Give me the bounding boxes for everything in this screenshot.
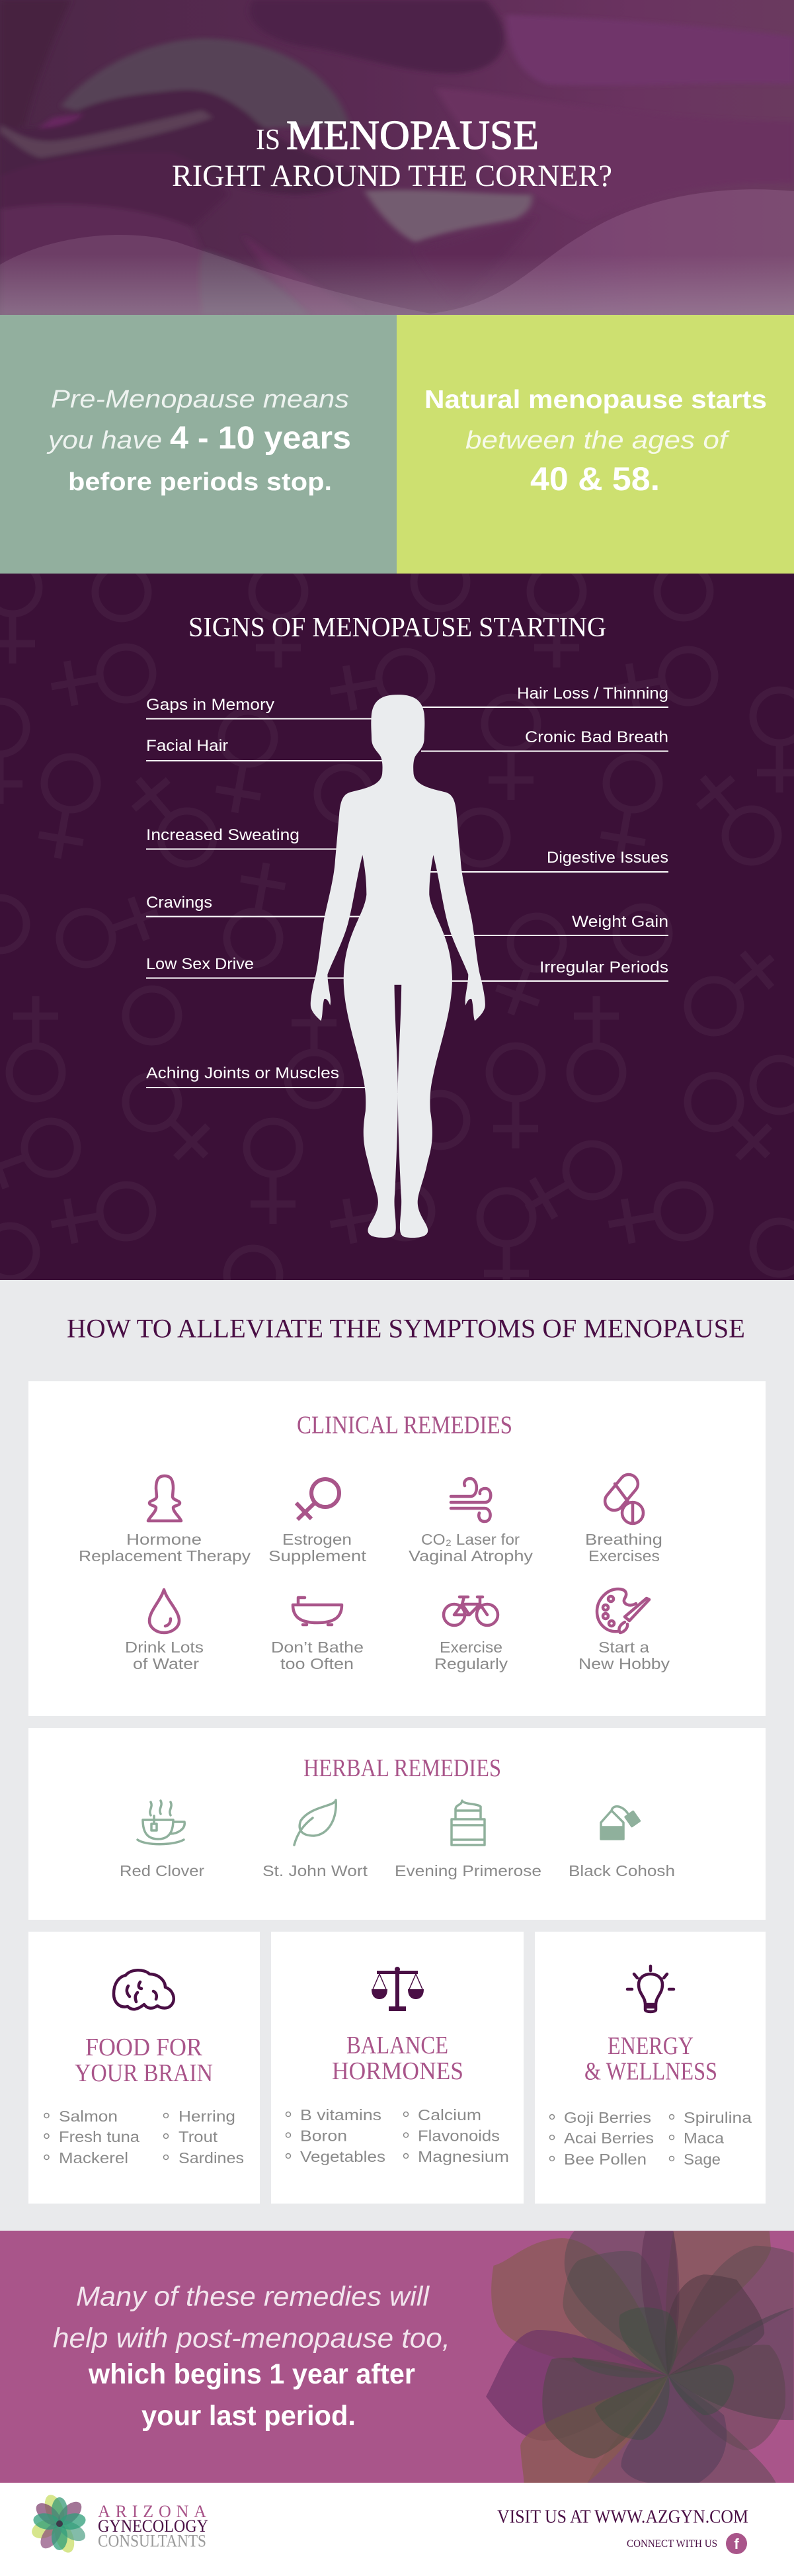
panel: pre-menopause bbox=[0, 315, 397, 574]
symptom labels: Digestive Issues bbox=[547, 849, 668, 867]
icon: jar bbox=[452, 1801, 485, 1845]
heading: food for your brain: YOUR BRAIN bbox=[75, 2059, 213, 2087]
text: breathing exercises: Exercises bbox=[588, 1547, 660, 1565]
panel: natural menopause: 40 & 58. bbox=[530, 460, 660, 497]
panel: pre-menopause: you have bbox=[46, 427, 162, 454]
body silhouette bbox=[311, 695, 485, 1238]
symptom leader lines bbox=[146, 707, 668, 1088]
website: VISIT US AT WWW.AZGYN.COM bbox=[497, 2507, 748, 2527]
list: hormone balancers: Calcium bbox=[418, 2106, 481, 2124]
panel: how to alleviate background bbox=[0, 1280, 794, 2231]
list: hormone balancers: B vitamins bbox=[300, 2106, 381, 2124]
symptom labels: Hair Loss / Thinning bbox=[517, 685, 668, 703]
heading: energy and wellness bbox=[584, 2032, 717, 2085]
text: start a new hobby: New Hobby bbox=[578, 1655, 670, 1672]
text: co2 laser: Vaginal Atrophy bbox=[409, 1547, 534, 1565]
text: don't bathe too often: too Often bbox=[280, 1655, 354, 1672]
list: energy foods: Maca bbox=[684, 2129, 724, 2147]
panel: pre-menopause: 4 - 10 years bbox=[170, 421, 351, 456]
icon: palette bbox=[597, 1589, 649, 1633]
title: IS bbox=[256, 123, 280, 155]
text: don't bathe too often bbox=[271, 1639, 364, 1672]
title bbox=[172, 113, 612, 193]
logo text bbox=[98, 2502, 208, 2551]
text: herbal labels: Black Cohosh bbox=[569, 1862, 675, 1879]
text: drink lots of water: of Water bbox=[133, 1655, 199, 1672]
list: energy foods: Goji Berries bbox=[564, 2109, 651, 2126]
list: energy foods: Spirulina bbox=[684, 2109, 752, 2126]
connect text: CONNECT WITH US bbox=[627, 2538, 717, 2550]
list: brain foods: Mackerel bbox=[59, 2149, 128, 2167]
text: breathing exercises: Breathing bbox=[585, 1531, 662, 1548]
text: exercise regularly: Exercise bbox=[440, 1639, 502, 1656]
text: hormone replacement therapy bbox=[79, 1531, 251, 1565]
text: start a new hobby: Start a bbox=[598, 1639, 649, 1656]
text: estrogen supplement: Supplement bbox=[268, 1547, 367, 1565]
icon: brain bbox=[114, 1970, 174, 2009]
text: drink lots of water bbox=[125, 1639, 204, 1672]
heading: how to alleviate: HOW TO ALLEVIATE THE SYMPTOMS OF MENOPAUSE bbox=[67, 1314, 745, 1343]
icon: tea bag bbox=[601, 1807, 639, 1839]
symptom labels: Cravings bbox=[146, 894, 212, 912]
title: MENOPAUSE bbox=[286, 113, 539, 158]
text: hormone replacement therapy: Replacement Therapy bbox=[79, 1547, 251, 1565]
text: co2 laser bbox=[409, 1531, 534, 1565]
symptom labels: Irregular Periods bbox=[539, 959, 668, 976]
panel: herbal remedies bbox=[28, 1728, 766, 1920]
heading: balance hormones: BALANCE bbox=[346, 2032, 448, 2059]
icon: facebook: f bbox=[734, 2536, 739, 2552]
icon: scales bbox=[372, 1967, 424, 2011]
logo text: ARIZONA bbox=[98, 2502, 206, 2521]
symptom labels: Weight Gain bbox=[572, 913, 668, 931]
icon: bicycle bbox=[444, 1597, 498, 1625]
text: breathing exercises bbox=[585, 1531, 662, 1565]
text: co2 laser: CO₂ Laser for bbox=[421, 1531, 520, 1548]
list: brain foods: Herring bbox=[179, 2108, 235, 2125]
symptom labels: Low Sex Drive bbox=[146, 955, 254, 973]
list: hormone balancers bbox=[286, 2106, 509, 2165]
icon: bathtub bbox=[293, 1598, 342, 1625]
icon: facebook bbox=[726, 2533, 747, 2554]
panel: clinical remedies bbox=[28, 1381, 766, 1716]
panel: natural menopause: between the ages of bbox=[465, 427, 730, 454]
panel: natural menopause bbox=[397, 315, 794, 574]
symptom labels: Gaps in Memory bbox=[146, 696, 274, 714]
canyon rock shapes bbox=[0, 0, 794, 315]
icon: tea cup bbox=[138, 1801, 184, 1844]
symptom labels: Cronic Bad Breath bbox=[525, 728, 668, 746]
heading: food for your brain: FOOD FOR bbox=[85, 2034, 203, 2061]
list: brain foods: Salmon bbox=[59, 2108, 118, 2125]
callout text bbox=[53, 2281, 450, 2432]
heading: balance hormones: HORMONES bbox=[332, 2057, 463, 2085]
text: estrogen supplement bbox=[268, 1531, 367, 1565]
text: exercise regularly bbox=[434, 1639, 508, 1672]
list: hormone balancers: Flavonoids bbox=[418, 2127, 500, 2145]
list: hormone balancers: Magnesium bbox=[418, 2148, 509, 2165]
callout text: your last period. bbox=[141, 2400, 356, 2432]
text: herbal labels bbox=[120, 1862, 675, 1879]
list: brain foods: Fresh tuna bbox=[59, 2128, 139, 2145]
list: energy foods: Bee Pollen bbox=[564, 2151, 647, 2168]
list: brain foods: Sardines bbox=[179, 2149, 244, 2167]
logo flower bbox=[29, 2492, 89, 2555]
list: energy foods: Sage bbox=[684, 2151, 721, 2168]
heading: herbal remedies: HERBAL REMEDIES bbox=[303, 1754, 501, 1782]
text: herbal labels: St. John Wort bbox=[262, 1862, 368, 1879]
text: exercise regularly: Regularly bbox=[434, 1655, 508, 1672]
text: hormone replacement therapy: Hormone bbox=[126, 1531, 202, 1548]
text: herbal labels: Red Clover bbox=[120, 1862, 204, 1879]
panel: pre-menopause: before periods stop. bbox=[68, 468, 332, 496]
callout text: which begins 1 year after bbox=[88, 2358, 415, 2390]
text: start a new hobby bbox=[578, 1639, 670, 1672]
logo text: CONSULTANTS bbox=[98, 2531, 206, 2551]
panel: pre-menopause: Pre-Menopause means bbox=[51, 386, 349, 413]
panel: signs of menopause bbox=[0, 556, 794, 1301]
text: estrogen supplement: Estrogen bbox=[282, 1531, 352, 1548]
header: canyon photo background with title bbox=[0, 0, 794, 315]
icon: female symbol bbox=[296, 1479, 339, 1520]
list: brain foods bbox=[44, 2108, 244, 2167]
symptom labels: Facial Hair bbox=[146, 737, 228, 755]
icon: light bulb bbox=[627, 1966, 674, 2012]
heading: food for your brain bbox=[75, 2034, 213, 2087]
heading: clinical remedies: CLINICAL REMEDIES bbox=[297, 1412, 512, 1439]
text: herbal labels: Evening Primerose bbox=[395, 1862, 541, 1879]
symptom labels bbox=[146, 685, 668, 1082]
icon: water drop bbox=[149, 1590, 179, 1633]
panel: energy and wellness bbox=[535, 1932, 766, 2204]
background venus symbols bbox=[0, 556, 794, 1301]
panel: food for your brain bbox=[28, 1932, 260, 2204]
heading: energy and wellness: & WELLNESS bbox=[584, 2057, 717, 2085]
list: energy foods bbox=[550, 2109, 752, 2168]
symptom labels: Aching Joints or Muscles bbox=[146, 1064, 339, 1082]
title: RIGHT AROUND THE CORNER? bbox=[172, 159, 612, 193]
text: don't bathe too often: Don’t Bathe bbox=[271, 1639, 364, 1656]
list: hormone balancers: Vegetables bbox=[300, 2148, 385, 2165]
panel: natural menopause: Natural menopause starts bbox=[424, 386, 767, 414]
panel: balance hormones bbox=[271, 1932, 524, 2204]
translucent waves bbox=[0, 235, 430, 315]
icon: pills bbox=[601, 1471, 643, 1524]
symptom labels: Increased Sweating bbox=[146, 826, 299, 844]
heading: balance hormones bbox=[332, 2032, 463, 2085]
heading: energy and wellness: ENERGY bbox=[608, 2032, 694, 2060]
icon: head bbox=[148, 1476, 181, 1521]
heading: signs: SIGNS OF MENOPAUSE STARTING bbox=[188, 613, 606, 643]
callout text: Many of these remedies will bbox=[76, 2281, 430, 2311]
callout text: help with post-menopause too, bbox=[53, 2322, 450, 2354]
list: brain foods: Trout bbox=[179, 2128, 218, 2145]
icon: wind bbox=[451, 1479, 491, 1522]
logo text: GYNECOLOGY bbox=[98, 2516, 208, 2536]
icon: leaf bbox=[294, 1800, 336, 1845]
text: drink lots of water: Drink Lots bbox=[125, 1639, 204, 1656]
footer bbox=[0, 2483, 794, 2576]
flower graphic bbox=[486, 2231, 794, 2483]
list: energy foods: Acai Berries bbox=[564, 2129, 654, 2147]
panel: post-menopause banner bbox=[0, 2231, 794, 2483]
list: hormone balancers: Boron bbox=[300, 2127, 347, 2145]
